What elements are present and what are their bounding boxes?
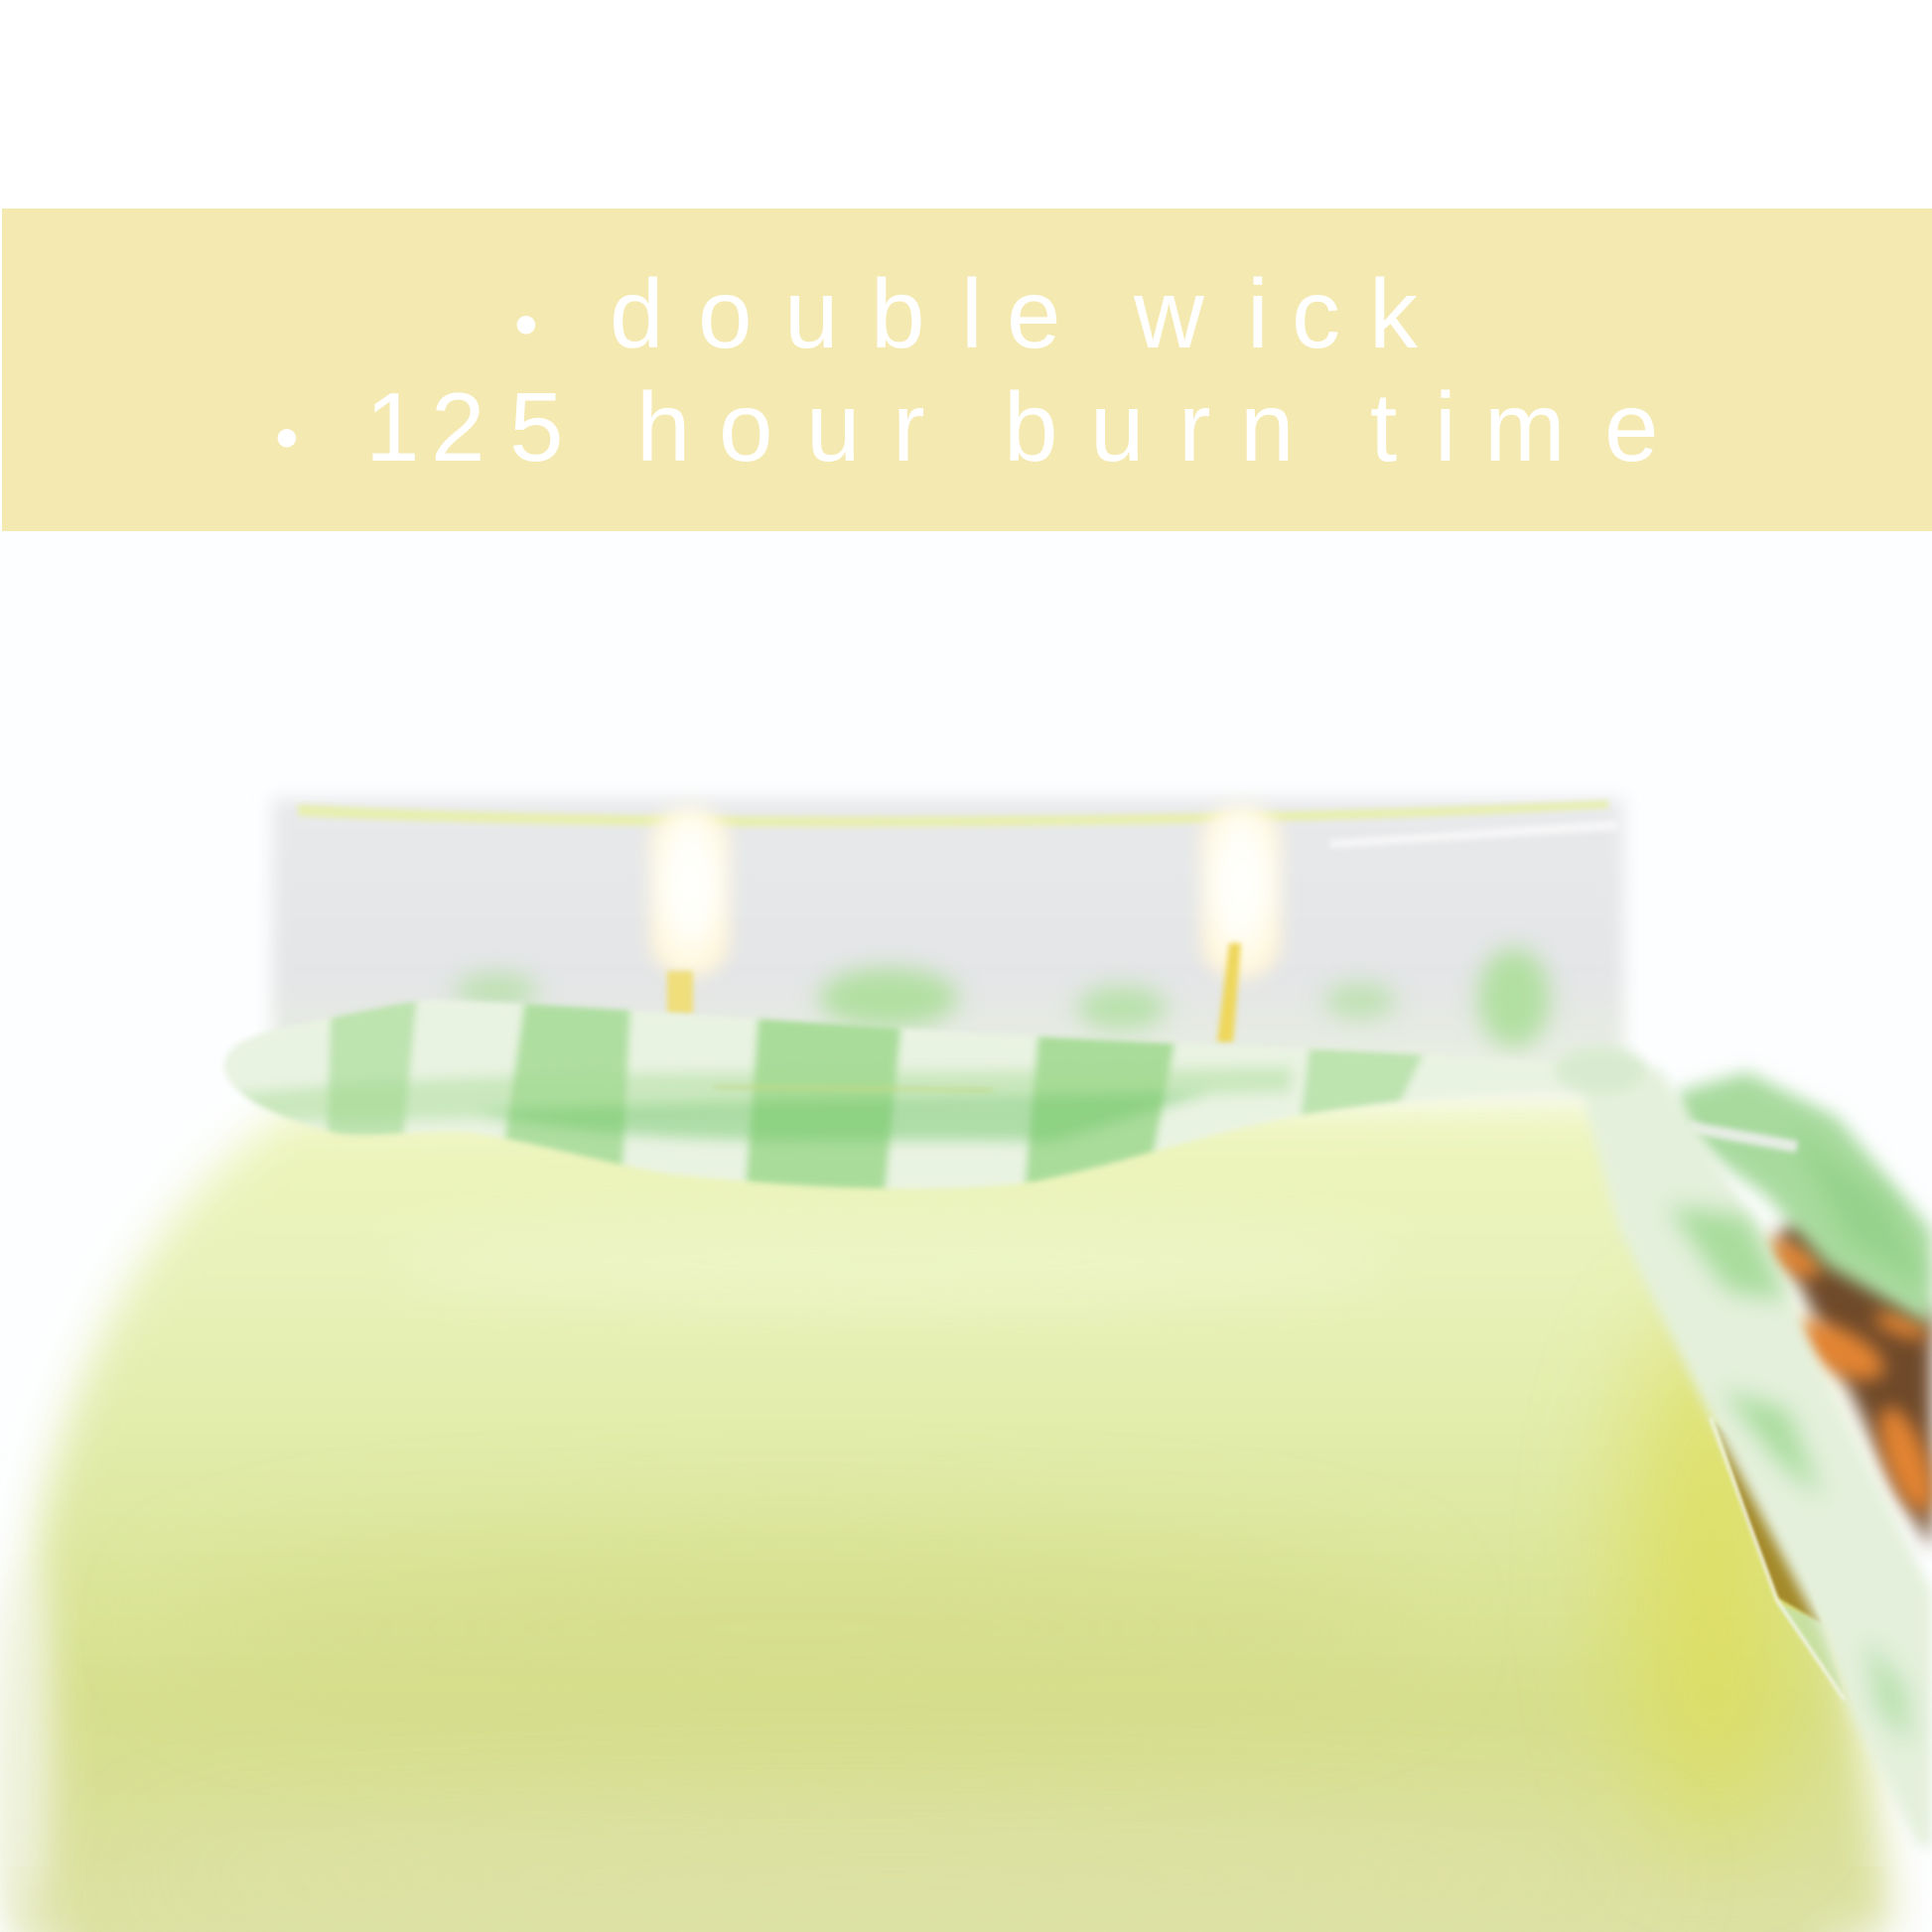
green fold: [1678, 1072, 1932, 1325]
fold darker shade: [1787, 1122, 1932, 1291]
gingham ribbon: [222, 999, 1436, 1191]
rim line: [298, 800, 1608, 827]
orange herb pieces: [1757, 1233, 1932, 1518]
tag white edge: [1711, 1418, 1845, 1700]
glass neck: [272, 798, 1624, 1096]
line: double wick: •: [514, 287, 538, 362]
photo background tint: [0, 531, 1932, 1932]
line: double wick: double wick: [610, 259, 1419, 368]
banner text: [275, 259, 1659, 482]
gold tag: [1715, 1421, 1822, 1623]
flame left: [650, 806, 730, 977]
banner band: [2, 208, 1932, 531]
line: 125 hour burn time: 125 hour burn time: [365, 372, 1659, 482]
ribbon tail: [1555, 1046, 1932, 1847]
glass highlight: [1330, 820, 1618, 848]
candle photo: [0, 798, 1932, 1932]
jar body base strip: [0, 1866, 1891, 1932]
green wax seen through glass: [455, 948, 1550, 1047]
knot: [1555, 1046, 1646, 1094]
white highlight strand: [1688, 1127, 1797, 1147]
flame right: [1201, 804, 1281, 979]
wick right: [1217, 943, 1241, 1042]
pale tag corner: [1777, 1603, 1845, 1698]
dark herb tag: [1777, 1216, 1932, 1549]
pale tail cloth: [1586, 1052, 1932, 1847]
tail green patches: [1668, 1206, 1911, 1747]
line: 125 hour burn time: •: [275, 400, 299, 476]
wax colour variation: [0, 1216, 1797, 1926]
jar body with lime wax: [14, 1102, 1891, 1932]
wick left: [667, 971, 693, 1015]
